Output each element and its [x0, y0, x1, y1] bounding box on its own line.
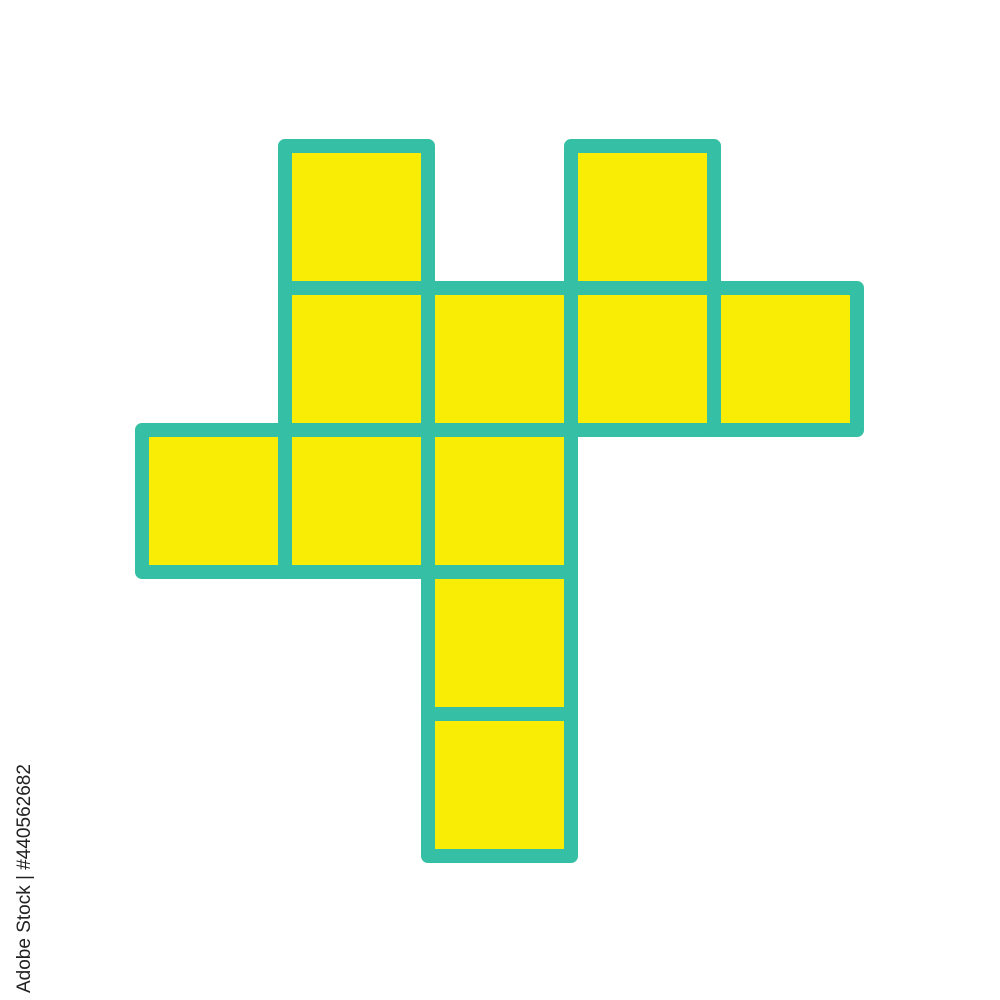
watermark text: Adobe Stock | #440562682 — [14, 764, 35, 993]
cube net — [142, 146, 857, 856]
